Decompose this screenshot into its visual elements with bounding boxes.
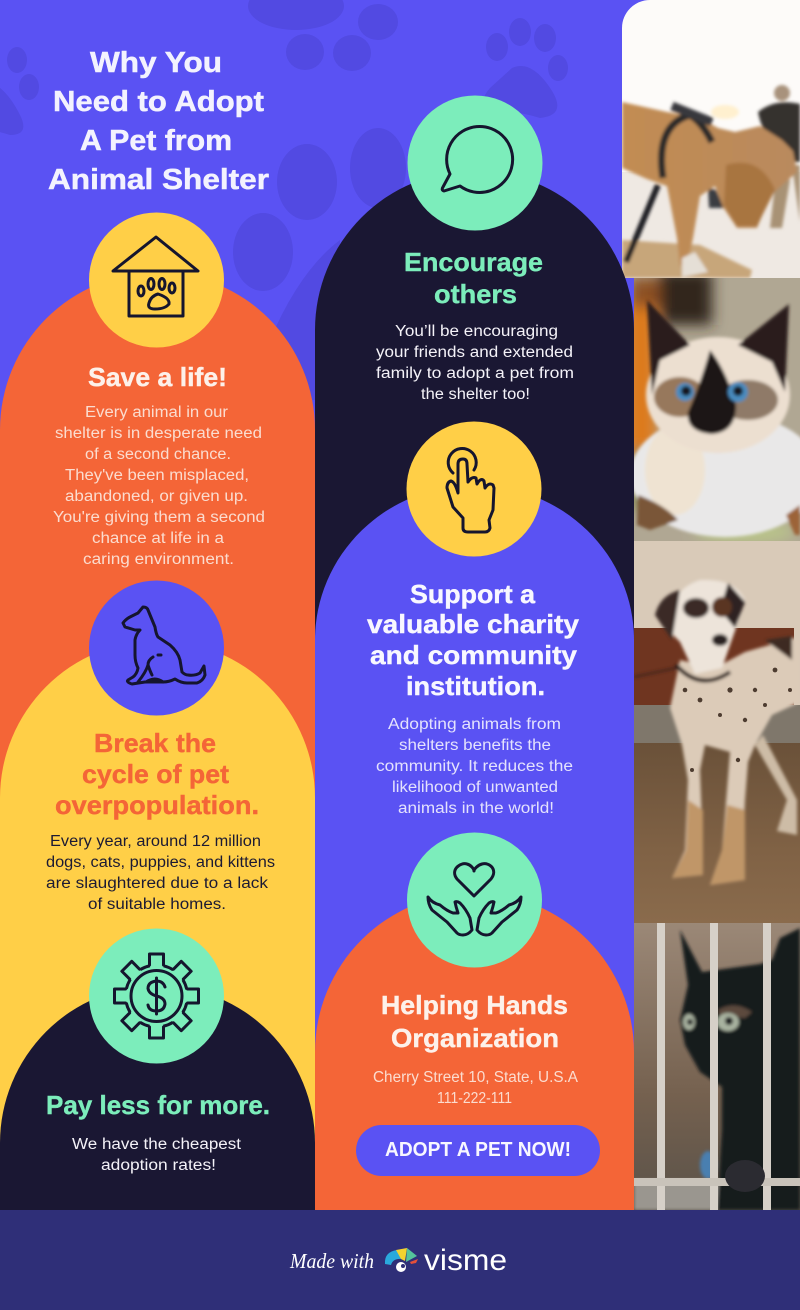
- heading: support charity: Support a: [410, 579, 536, 609]
- body text: save a life: They've been misplaced,: [65, 467, 249, 484]
- title: Need to Adopt: [53, 86, 264, 118]
- body text: save a life: [53, 404, 265, 568]
- body text: pay less: [72, 1136, 242, 1174]
- title: A Pet from: [80, 125, 232, 157]
- arch: orange: [0, 272, 315, 1210]
- panel: pay less for more: [0, 986, 315, 1210]
- heading: encourage others: Encourage: [404, 247, 543, 277]
- photo: siamese kitten: [625, 270, 800, 544]
- photo: spotted dog: [634, 541, 800, 923]
- icon: hands with heart: [407, 832, 542, 968]
- heading: save a life: Save a life!: [88, 362, 227, 392]
- body text: break the cycle: dogs, cats, puppies, and kittens: [46, 854, 275, 871]
- heading: support charity: [367, 579, 580, 701]
- heading: organization name: [381, 990, 568, 1053]
- body text: break the cycle: of suitable homes.: [88, 896, 226, 913]
- heading: support charity: institution.: [406, 671, 545, 701]
- address and phone: 111-222-111: [437, 1090, 512, 1107]
- body text: support charity: shelters benefits the: [399, 737, 551, 754]
- address and phone: Cherry Street 10, State, U.S.A: [373, 1069, 579, 1086]
- body text: encourage others: [376, 323, 574, 403]
- body text: pay less: adoption rates!: [101, 1157, 216, 1174]
- heading: break the cycle: overpopulation.: [55, 790, 259, 820]
- button: adopt a pet now: [356, 1125, 600, 1176]
- address and phone: [373, 1069, 579, 1107]
- body text: break the cycle: [46, 833, 275, 913]
- icon: pointing hand: [406, 422, 542, 556]
- heading: organization name: Helping Hands: [381, 990, 568, 1020]
- body text: encourage others: your friends and extended: [376, 344, 573, 361]
- body text: save a life: Every animal in our: [85, 404, 228, 421]
- background paw prints: [0, 0, 568, 400]
- icon: dollar gear: [89, 928, 224, 1064]
- body text: support charity: likelihood of unwanted: [392, 779, 558, 796]
- arch: dark right: [315, 171, 634, 1210]
- panel: save a life: [0, 272, 315, 1210]
- body text: break the cycle: Every year, around 12 million: [50, 833, 261, 850]
- heading: break the cycle: cycle of pet: [82, 759, 229, 789]
- arch: yellow: [0, 640, 315, 1210]
- heading: support charity: and community: [370, 640, 578, 670]
- body text: save a life: shelter is in desperate need: [55, 425, 262, 442]
- heading: organization name: Organization: [391, 1023, 559, 1053]
- heading: pay less: Pay less for more.: [46, 1090, 270, 1120]
- title: [48, 47, 269, 196]
- panel: support charity: [315, 485, 634, 1210]
- body text: encourage others: family to adopt a pet from: [376, 365, 574, 382]
- body text: save a life: abandoned, or given up.: [65, 488, 248, 505]
- photo: dog on leash: [622, 0, 800, 278]
- arch: blue right: [315, 485, 634, 1210]
- body text: encourage others: You’ll be encouraging: [395, 323, 558, 340]
- heading: support charity: valuable charity: [367, 609, 580, 639]
- body text: pay less: We have the cheapest: [72, 1136, 242, 1153]
- footer: [0, 1210, 800, 1310]
- button: adopt a pet now: ADOPT A PET NOW!: [385, 1139, 571, 1161]
- footer: visme logo mark: [385, 1248, 418, 1272]
- title: Why You: [90, 47, 222, 79]
- icon: sitting dog: [89, 580, 224, 716]
- footer: visme wordmark: visme: [424, 1244, 507, 1277]
- panel: helping hands organization: [315, 893, 634, 1210]
- heading: break the cycle: Break the: [94, 728, 216, 758]
- body text: save a life: You're giving them a second: [53, 509, 265, 526]
- icon: speech bubble: [408, 96, 542, 230]
- heading: encourage others: others: [434, 279, 517, 309]
- panel: break the cycle: [0, 640, 315, 1210]
- heading: break the cycle: [55, 728, 259, 820]
- photo: black kitten behind bars: [634, 923, 800, 1210]
- title: Animal Shelter: [48, 164, 269, 196]
- body text: encourage others: the shelter too!: [421, 386, 530, 403]
- body text: support charity: Adopting animals from: [388, 716, 561, 733]
- body text: save a life: chance at life in a: [92, 530, 224, 547]
- heading: encourage others: [404, 247, 543, 309]
- arch: dark: [0, 986, 315, 1210]
- body text: support charity: animals in the world!: [398, 800, 554, 817]
- body text: save a life: caring environment.: [83, 551, 234, 568]
- body text: support charity: community. It reduces the: [376, 758, 573, 775]
- body text: break the cycle: are slaughtered due to a lack: [46, 875, 268, 892]
- icon: house with paw: [89, 212, 224, 348]
- body text: support charity: [376, 716, 573, 817]
- arch: orange right: [315, 893, 634, 1210]
- body text: save a life: of a second chance.: [85, 446, 231, 463]
- panel: encourage others: [315, 171, 634, 1210]
- footer: made with: Made with: [289, 1249, 374, 1273]
